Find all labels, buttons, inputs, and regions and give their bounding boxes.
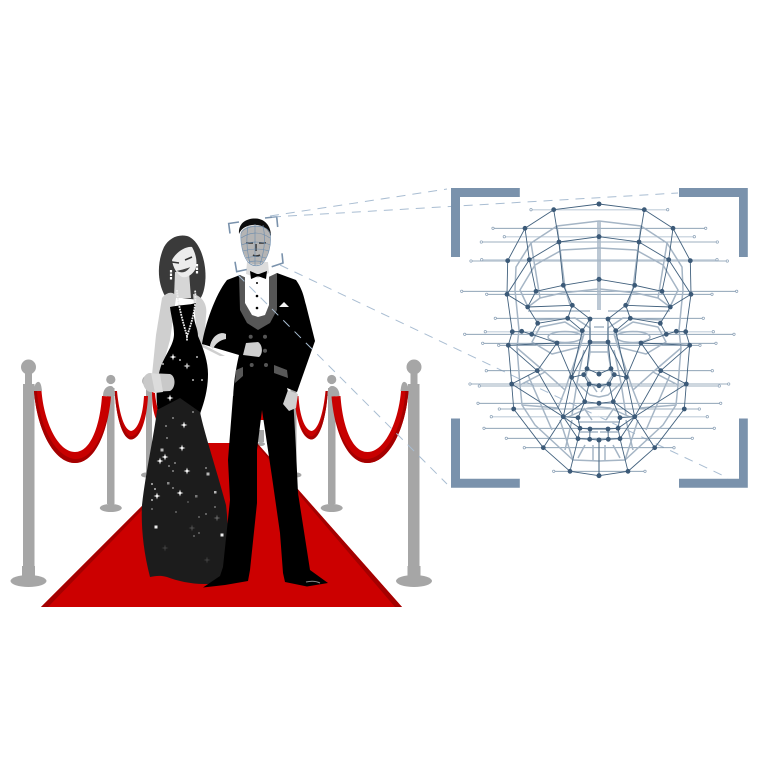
jacket pockets (235, 365, 288, 383)
neck (246, 262, 269, 278)
rear stanchions and ropes (10, 360, 432, 587)
gown sparkles (154, 354, 220, 564)
bow tie (250, 271, 267, 279)
lower gown (142, 398, 228, 584)
pocket square (279, 302, 289, 307)
small face bracket (229, 217, 283, 272)
trousers and shoes (203, 396, 328, 588)
shirt (245, 272, 269, 317)
mesh half, mirrored (505, 202, 601, 478)
jacket buttons (249, 335, 268, 367)
dashed projection lines (238, 189, 728, 484)
leader end points (460, 208, 738, 472)
shirt studs (256, 282, 258, 309)
man in tuxedo (202, 218, 328, 588)
pearl necklace (177, 290, 195, 341)
lapel (239, 273, 277, 330)
small sparkles (151, 356, 224, 537)
large face mesh (460, 202, 738, 478)
large corner brackets (451, 188, 748, 488)
facial features (246, 243, 266, 256)
arm and shoulder (152, 293, 176, 389)
clutch (143, 373, 174, 392)
woman in gown (142, 235, 228, 584)
hair (159, 235, 206, 300)
hair (239, 218, 271, 236)
neck (174, 272, 191, 298)
jacket (202, 273, 315, 404)
red carpet (41, 443, 402, 607)
hands (243, 342, 262, 357)
upper gown (157, 303, 208, 414)
head (241, 225, 271, 265)
face (172, 247, 196, 277)
earrings (171, 264, 197, 280)
mesh leader lines (462, 210, 737, 471)
tracking mesh on face (241, 224, 271, 266)
